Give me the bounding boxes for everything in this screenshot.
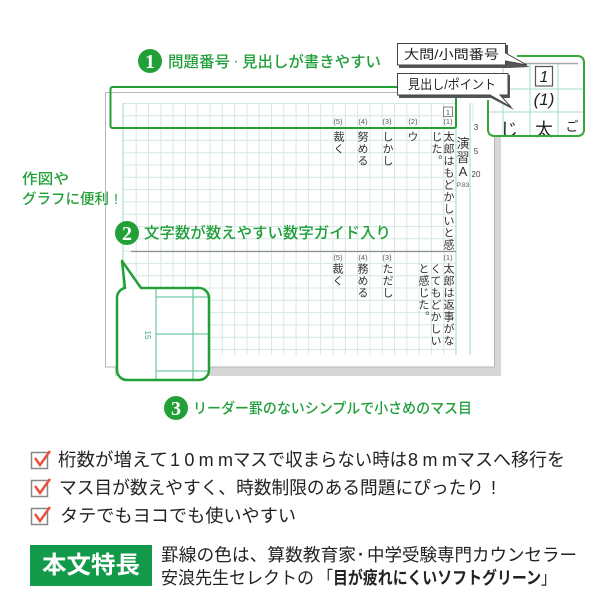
margin notes: exercise name and counts <box>456 123 481 189</box>
margin notes: exercise name and counts: 習 <box>456 150 470 165</box>
side note: drawing and graphs <box>22 171 118 208</box>
feature description: 「目が疲れにくいソフトグリーン」 <box>318 568 556 588</box>
upper exercise: handwritten answers: (3) <box>382 117 392 126</box>
side note: drawing and graphs: ! <box>114 192 118 208</box>
margin notes: exercise name and counts: A <box>459 164 468 179</box>
item 1 <box>32 450 565 470</box>
zoom panel: number guide <box>117 261 209 380</box>
item 2: ! <box>491 478 496 498</box>
lower exercise: handwritten answers: ただし <box>380 263 396 299</box>
upper exercise: handwritten answers: しかし <box>380 131 396 167</box>
lower exercise: handwritten answers: くてもどかしい <box>428 263 444 347</box>
checklist <box>32 450 565 526</box>
upper exercise: handwritten answers: 裁く <box>331 131 347 155</box>
feature description <box>161 544 577 588</box>
side note: drawing and graphs: 作図や <box>22 171 69 188</box>
margin notes: exercise name and counts: 20 <box>472 170 481 179</box>
margin notes: exercise name and counts: P.83 <box>457 182 470 189</box>
upper exercise: handwritten answers: じた。 <box>429 131 445 167</box>
lower exercise: handwritten answers: (1) <box>443 253 453 262</box>
lower exercise: handwritten answers: と感じた。 <box>416 263 432 323</box>
heading 1: · <box>233 53 239 70</box>
zoom panel: question numbers: 太 <box>535 120 553 140</box>
heading 2: 2 <box>122 223 132 245</box>
item 2: マス目が数えやすく、時数制限のある問題にぴったり <box>59 478 484 498</box>
lower exercise: handwritten answers: 太郎は返事がな <box>441 263 457 347</box>
heading 2: 文字数が数えやすい数字ガイド入り <box>144 223 391 242</box>
notebook page <box>106 92 501 376</box>
item 1: マスで収まらない時は <box>233 450 407 470</box>
lower exercise: handwritten answers: (3) <box>382 253 392 262</box>
lower exercise: handwritten answers: (5) <box>333 253 343 262</box>
upper exercise: handwritten answers: (1) <box>443 117 453 126</box>
heading 3: リーダー罫のないシンプルで小さめのマス目 <box>193 400 472 418</box>
callout: 大問/小問番号 <box>398 44 530 68</box>
margin notes: exercise name and counts: 3 <box>474 123 479 132</box>
feature description: · <box>358 544 364 564</box>
callout: 見出し/ポイント: 見出し/ポイント <box>408 77 496 92</box>
upper exercise: handwritten answers: 1 <box>446 108 450 117</box>
margin notes: exercise name and counts: 演 <box>456 136 470 151</box>
upper exercise: handwritten answers: 努める <box>355 130 371 167</box>
zoom panel: question numbers: ご <box>565 119 579 134</box>
heading 3: 3 <box>171 398 181 420</box>
feature description: 安浪先生セレクトの <box>161 568 314 588</box>
lower exercise: handwritten answers: 務める <box>355 262 371 299</box>
zoom panel: question numbers: (1) <box>534 90 554 109</box>
item 1: マスへ移行を <box>457 450 565 470</box>
item 1: 10mm <box>170 450 233 470</box>
upper exercise: handwritten answers: (5) <box>333 117 343 126</box>
heading 2 <box>115 221 391 245</box>
upper exercise: handwritten answers: (2) <box>408 117 418 126</box>
zoom panel: question numbers: じ <box>500 120 518 140</box>
upper exercise: handwritten answers: 太郎はもどかしいと感 <box>441 131 457 251</box>
heading 1: 1 <box>145 51 155 73</box>
heading 1: 問題番号 <box>168 53 230 71</box>
heading 1: 見出しが書きやすい <box>242 52 381 71</box>
item 1: 8mm <box>408 450 457 470</box>
upper exercise: handwritten answers <box>331 107 457 251</box>
lower exercise: handwritten answers: (4) <box>358 253 368 262</box>
feature description: 罫線の色は、算数教育家 <box>161 545 356 565</box>
margin notes: exercise name and counts: 5 <box>474 147 479 156</box>
highlight frame: heading area <box>110 87 456 128</box>
zoom panel: question numbers <box>488 56 584 140</box>
upper exercise: handwritten answers: ウ <box>405 131 421 143</box>
zoom panel: number guide: 15 <box>143 331 152 340</box>
callout: 見出し/ポイント <box>398 74 514 110</box>
side note: drawing and graphs: グラフに便利 <box>22 191 109 208</box>
badge: 本文特長 <box>30 545 152 586</box>
heading 3 <box>164 396 472 420</box>
heading 1 <box>138 49 381 73</box>
feature description: 中学受験専門カウンセラー <box>367 545 577 565</box>
lower exercise: handwritten answers <box>330 253 457 347</box>
zoom panel: question numbers: 1 <box>540 69 548 86</box>
badge: 本文特長: 本文特長 <box>42 552 140 579</box>
upper exercise: handwritten answers: (4) <box>358 117 368 126</box>
lower exercise: handwritten answers: 裁く <box>330 263 346 287</box>
item 3: タテでもヨコでも使いやすい <box>60 506 296 526</box>
callout: 大問/小問番号: 大問/小問番号 <box>404 47 499 62</box>
item 1: 桁数が増えて <box>58 450 168 470</box>
